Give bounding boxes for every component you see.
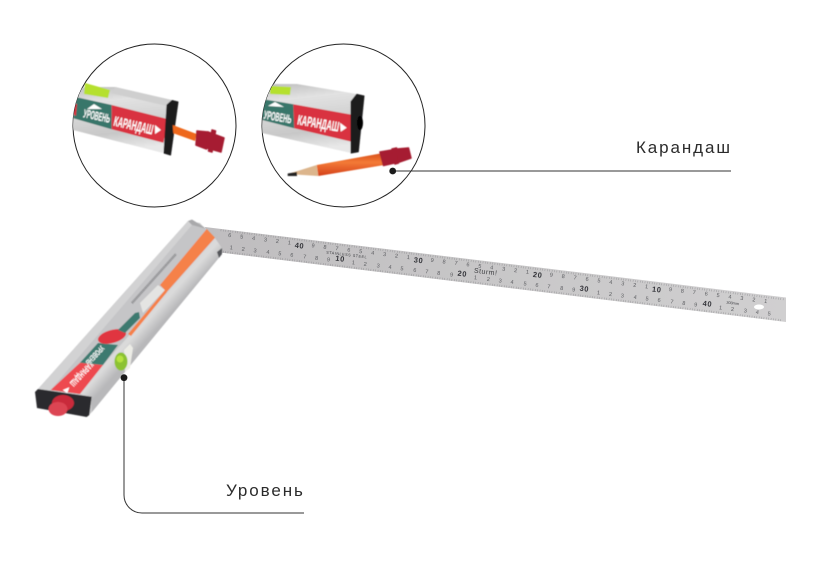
white spec label bbox=[140, 285, 165, 313]
black end cap bbox=[351, 94, 364, 153]
level body, close-up bbox=[262, 84, 357, 153]
upper scale numbers bbox=[227, 232, 768, 308]
upper scale numbers: 10 bbox=[652, 284, 662, 295]
leader line: Карандаш bbox=[389, 168, 731, 174]
detail circle: pencil inserted in level bbox=[70, 44, 236, 207]
orange pencil shaft bbox=[173, 125, 197, 141]
spirit vial bbox=[114, 344, 133, 372]
top face of body bbox=[121, 92, 171, 106]
infographic canvas bbox=[34, 44, 786, 514]
label text: Карандаш: КАРАНДАШ bbox=[68, 360, 96, 388]
red dot at edge bbox=[73, 104, 77, 116]
ruler tick marks bbox=[218, 230, 785, 320]
steel ruler blade bbox=[205, 227, 786, 322]
lower scale numbers bbox=[229, 241, 772, 318]
hanging hole bbox=[754, 304, 764, 310]
green label: Уровень bbox=[73, 97, 112, 129]
green pill badge bbox=[118, 312, 140, 333]
upper scale numbers: 20 bbox=[532, 270, 543, 280]
red round seal bbox=[96, 326, 128, 347]
rail top corner bbox=[188, 220, 207, 229]
black end cap bbox=[164, 100, 178, 155]
leader line: Уровень bbox=[121, 374, 304, 513]
ruler markings: Sturm! bbox=[473, 268, 498, 277]
aluminium housing bbox=[35, 221, 222, 417]
lower scale numbers: 123456789 bbox=[473, 275, 575, 294]
lower scale numbers: 10 bbox=[335, 254, 345, 264]
upper rail bbox=[38, 221, 192, 390]
level body, main view bbox=[35, 220, 222, 417]
green label: Уровень: УРОВЕНЬ bbox=[263, 108, 293, 126]
upper scale numbers: 987654321 bbox=[311, 243, 410, 261]
label: Карандаш: Карандаш bbox=[636, 138, 732, 157]
ruler markings: 300mm bbox=[726, 301, 739, 306]
label: Уровень: Уровень bbox=[226, 481, 305, 500]
green label: Уровень bbox=[262, 99, 294, 128]
upper scale numbers: 987654321 bbox=[549, 272, 648, 290]
upper scale numbers: 987654321 bbox=[430, 258, 529, 276]
lower scale numbers: 123456789 bbox=[597, 290, 698, 309]
spirit vial bbox=[84, 83, 110, 98]
red label: Карандаш: КАРАНДАШ bbox=[296, 112, 340, 135]
lower scale numbers: 12345 bbox=[719, 305, 771, 318]
ruler markings: STAINLESS STEEL bbox=[326, 251, 367, 259]
pencil red cap bbox=[196, 130, 224, 152]
lower scale numbers: 20 bbox=[457, 269, 468, 279]
upper scale numbers: 40 bbox=[294, 241, 305, 251]
spirit vial bbox=[270, 86, 291, 95]
lower scale numbers: 123456789 bbox=[229, 245, 330, 263]
level body, close-up bbox=[70, 87, 172, 153]
upper scale numbers: 654321 bbox=[228, 233, 291, 247]
fine print on rail bbox=[132, 254, 176, 303]
green label bbox=[80, 343, 118, 365]
red label: Карандаш bbox=[112, 105, 168, 143]
lower scale numbers: 123456789 bbox=[351, 260, 453, 279]
upper scale numbers: 987654321 bbox=[668, 287, 768, 305]
red label: Карандаш: КАРАНДАШ bbox=[112, 113, 155, 137]
inner corner shadow bbox=[217, 248, 222, 258]
black end cap bbox=[35, 389, 92, 417]
pencil bbox=[288, 148, 411, 176]
lower scale numbers: 30 bbox=[579, 284, 590, 294]
ruler markings bbox=[326, 250, 739, 307]
orange strip bbox=[160, 229, 215, 292]
label arrow bbox=[63, 387, 69, 393]
red label bbox=[51, 363, 103, 394]
detail circle: pencil inserted in level: УРОВЕНЬ bbox=[82, 106, 112, 126]
label text: Уровень: УРОВЕНЬ bbox=[84, 344, 106, 367]
lower scale numbers: 40 bbox=[702, 299, 713, 309]
upper scale numbers: 30 bbox=[413, 255, 424, 265]
red pencil button bbox=[48, 395, 74, 416]
lower face bbox=[80, 238, 222, 412]
red label: Карандаш bbox=[293, 104, 353, 142]
detail circle: pencil removed from level bbox=[262, 44, 425, 207]
recessed label area bbox=[51, 225, 215, 394]
